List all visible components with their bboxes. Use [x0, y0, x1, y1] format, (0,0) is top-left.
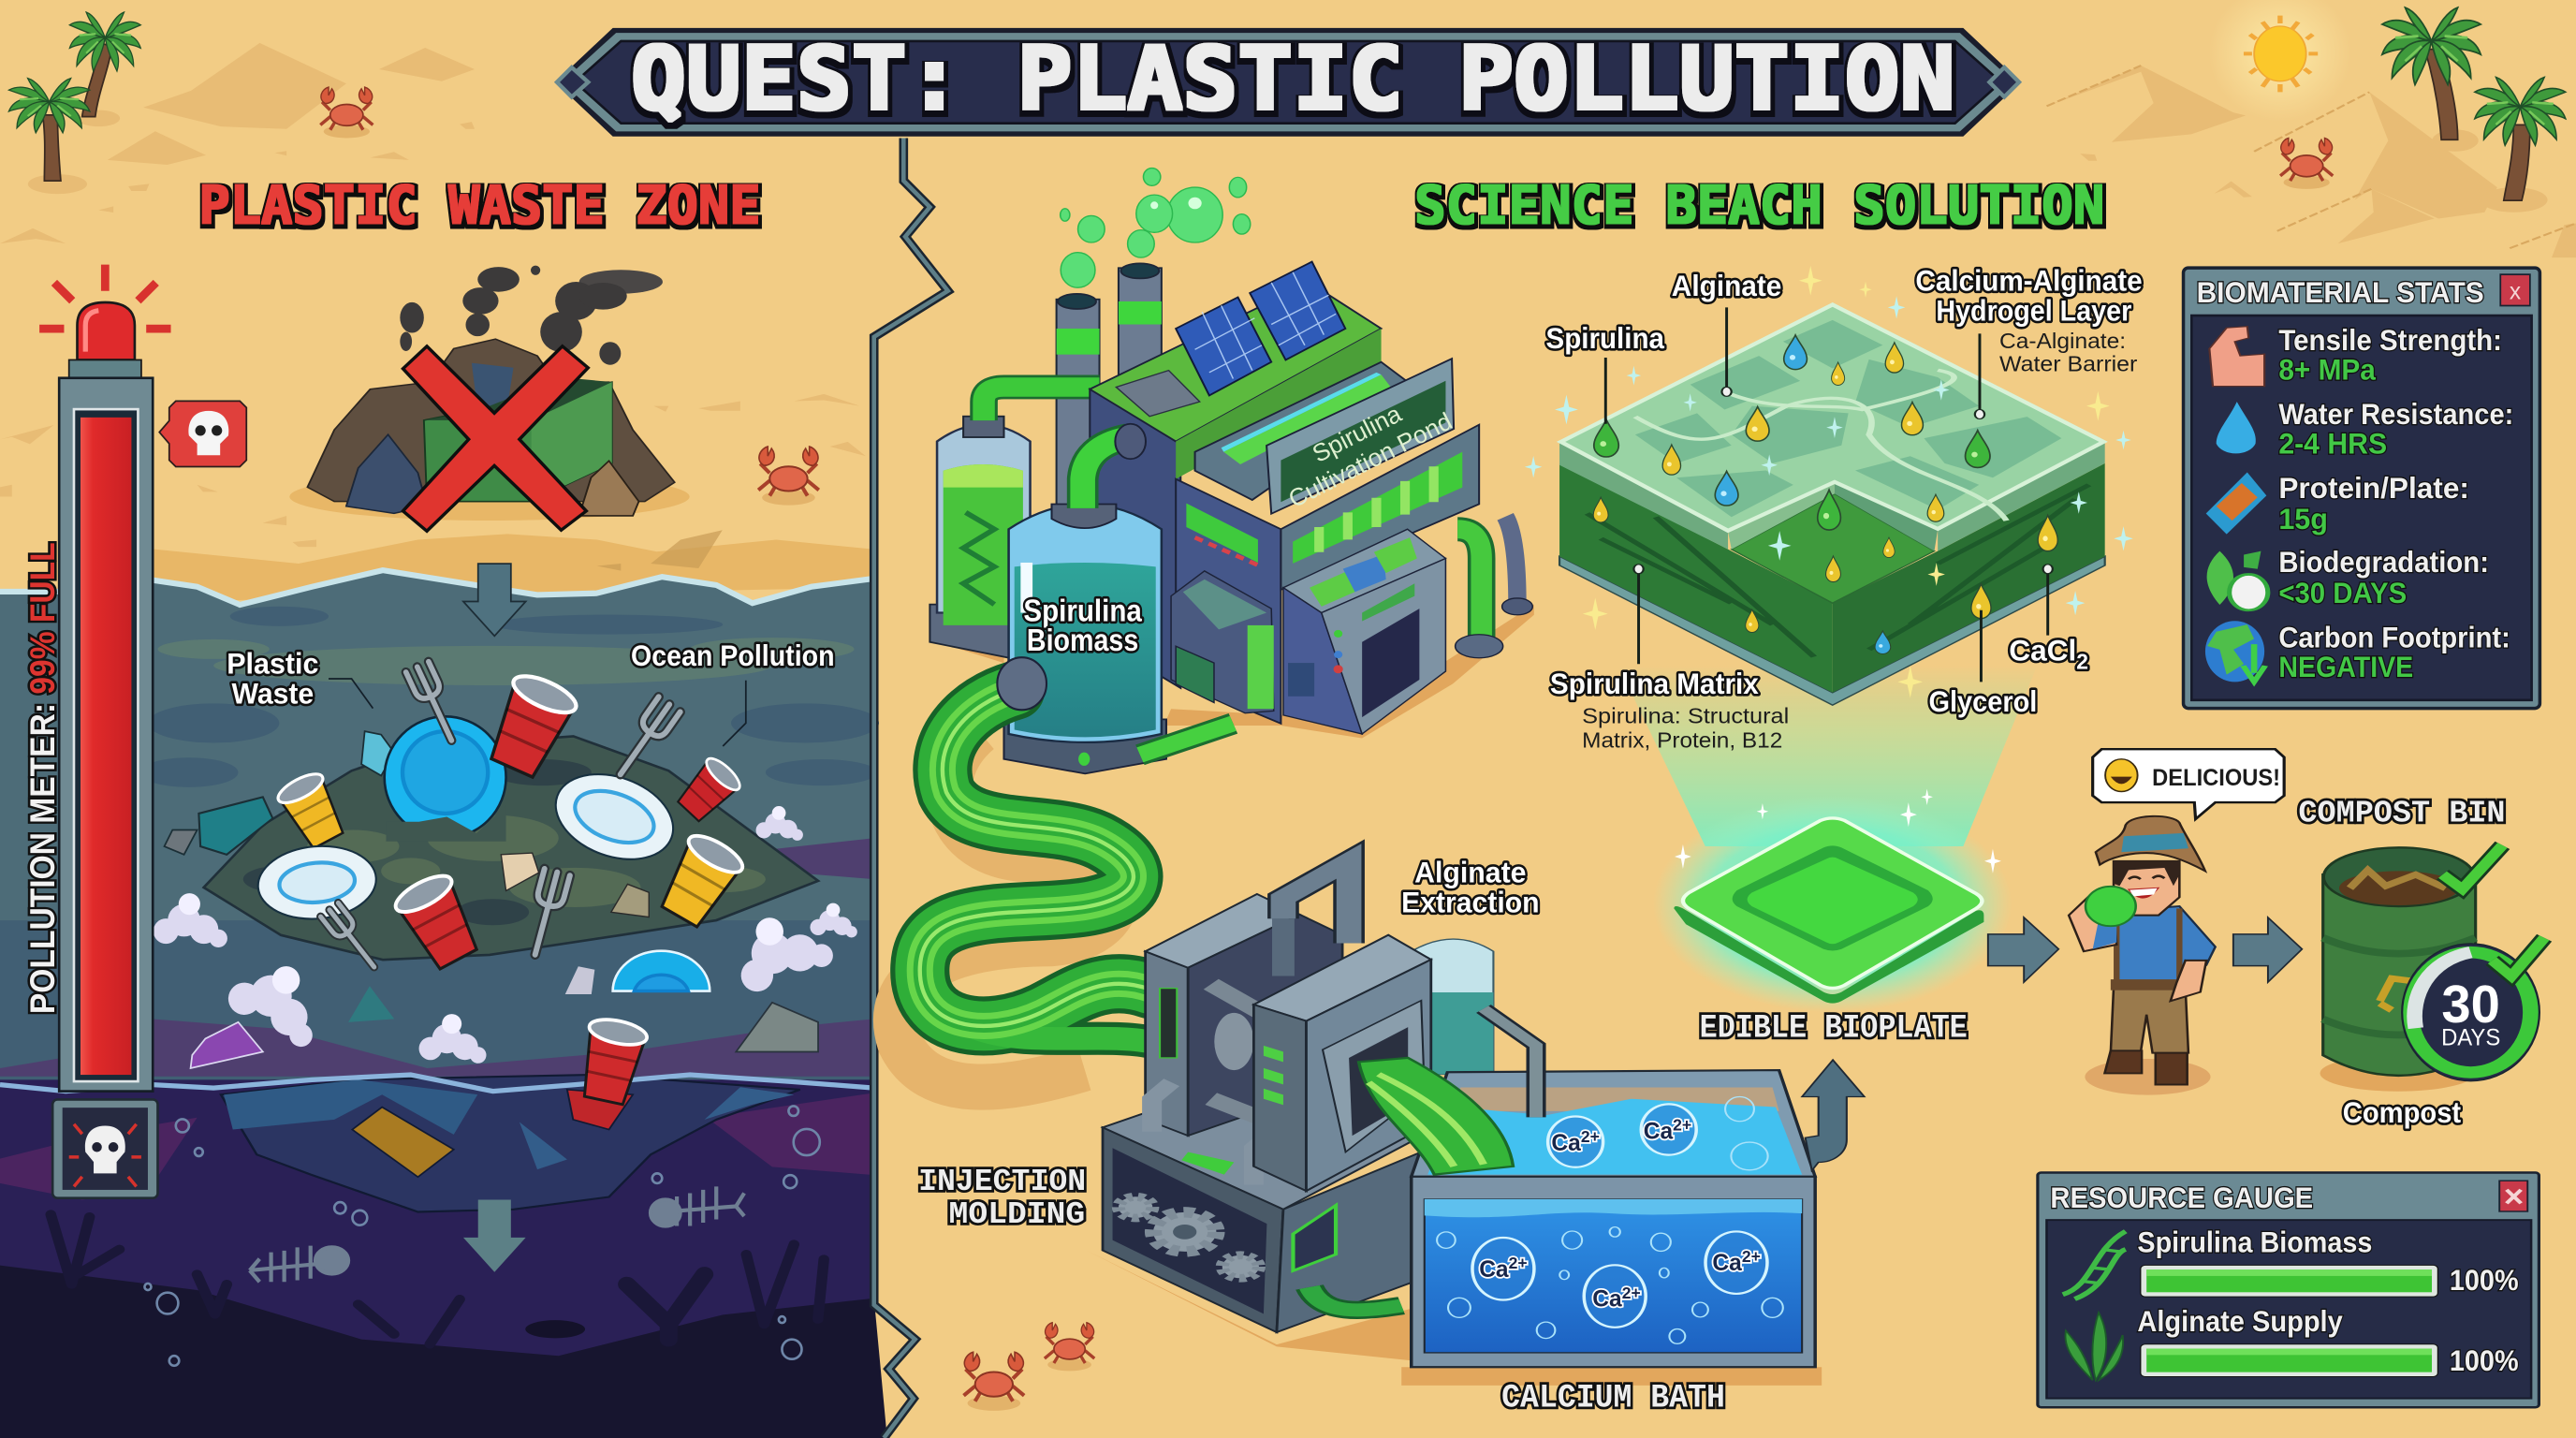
ion bubbles: [1472, 1104, 1767, 1328]
extruded alginate: [1359, 1058, 1513, 1175]
tank outlet ring: [997, 657, 1046, 710]
water: [0, 570, 874, 1085]
water patches: [139, 607, 879, 787]
green spirulina tube: [920, 690, 1150, 1042]
labels: machine and bath: [918, 856, 1725, 1417]
hydrogel block diagram: [1525, 266, 2133, 705]
crabs: [320, 87, 2333, 1411]
compost labels: Compost: [2343, 1095, 2462, 1129]
dunes: top right: [2047, 66, 2576, 257]
plate piece: [2086, 887, 2136, 926]
pipe top: [984, 387, 1100, 420]
alarm light: [39, 265, 171, 378]
labels: machine and bath: MOLDING: [949, 1197, 1085, 1233]
base strip: [1559, 556, 2105, 705]
icon: water drop: [2217, 402, 2256, 453]
lower left wall: [1176, 479, 1281, 724]
leader lines: [1605, 307, 2048, 682]
pond: [1195, 362, 1414, 500]
sign: [1266, 359, 1454, 514]
hat: [2096, 816, 2205, 871]
icon: muscle arm: [2205, 327, 2268, 682]
gears: [1119, 1196, 1259, 1278]
skull box: [52, 1099, 157, 1198]
sign text: Cultivation Pond: [1284, 406, 1456, 513]
label: edible bioplate: EDIBLE BIOPLATE: [1700, 1010, 1968, 1048]
waterline: [0, 1075, 874, 1092]
hydrogel labels: Spirulina: Structural: [1582, 703, 1789, 727]
Ca ions labels: Ca: [1712, 1251, 1742, 1276]
sparkles: [1555, 395, 1578, 424]
dunes: top left: [0, 43, 866, 547]
compost bin: [2320, 845, 2544, 1092]
heading: science beach solution: SCIENCE BEACH SOLUTION: [1414, 176, 2104, 237]
compost labels: [2298, 797, 2506, 1129]
arms: [2069, 893, 2116, 951]
hydrogel labels: Spirulina: [1546, 321, 1664, 355]
title banner: [555, 28, 2021, 137]
panel screen: [1293, 1205, 1336, 1270]
panel: resource gauge: [2038, 1173, 2539, 1407]
panel: plastic waste zone sea: [0, 530, 887, 1438]
base: [1103, 1074, 1414, 1210]
compost labels: COMPOST BIN: [2298, 797, 2506, 832]
skull badge: [159, 401, 246, 467]
back tank: [929, 417, 1031, 659]
floating debris: [154, 806, 857, 1107]
smoke: [400, 266, 663, 365]
head: [2114, 861, 2179, 916]
Ca ions labels: 2+: [1622, 1284, 1641, 1302]
towers: [1146, 951, 1188, 1136]
torso: [2116, 906, 2216, 988]
bath: [1401, 1367, 1822, 1386]
Ca ions labels: 2+: [1673, 1116, 1691, 1135]
panel: resource gauge: 100%: [2450, 1263, 2519, 1297]
labels: plastic waste, ocean pollution: Ocean Pollution: [631, 638, 835, 672]
panel: resource gauge: Alginate Supply: [2137, 1304, 2343, 1338]
arrow: waste to ocean: [463, 564, 526, 636]
panel: biomaterial stats: Carbon Footprint:: [2278, 621, 2510, 654]
icon: dumpster with red X: [289, 266, 690, 531]
label: spirulina biomass: Biomass: [1027, 624, 1138, 658]
panel: biomaterial stats: Protein/Plate:: [2278, 471, 2469, 505]
icon: earth: [2205, 621, 2264, 682]
compost labels: 30: [2441, 975, 2500, 1034]
deep: [0, 1079, 874, 1438]
icon: fish skeletons: [250, 1186, 744, 1282]
plastic waste items: [198, 797, 272, 855]
character: explorer eating plate: [2069, 816, 2216, 1095]
right pipes: [1505, 517, 1517, 605]
panel: biomaterial stats: x: [2510, 279, 2522, 304]
notch: [1732, 493, 1934, 603]
arrow: ocean to seabed: [463, 1199, 526, 1272]
labels: plastic waste, ocean pollution: Waste: [231, 676, 314, 710]
Ca ions labels: Ca: [1479, 1257, 1509, 1283]
30 day ring: [2402, 944, 2539, 1081]
gears in tower: [1214, 1013, 1253, 1070]
Ca ions labels: 2+: [1581, 1127, 1600, 1146]
hydrogel labels: Glycerol: [1928, 684, 2037, 718]
panel: biomaterial stats: 2-4 HRS: [2278, 426, 2387, 460]
icon: sun: [2209, 0, 2351, 122]
panel: biomaterial stats: NEGATIVE: [2278, 650, 2413, 683]
panel: biomaterial stats: 15g: [2278, 502, 2328, 536]
label: spirulina biomass: [1023, 594, 1142, 658]
arrow up: [1802, 1060, 1865, 1170]
factory: spirulina cultivation pond: [929, 262, 1534, 738]
window header: BIOMATERIAL STATS: [2197, 275, 2484, 309]
arrows: [1988, 917, 2058, 982]
panel: biomaterial stats: 8+ MPa: [2278, 353, 2376, 387]
back tank: [1412, 939, 1493, 1074]
labels: machine and bath: CALCIUM BATH: [1501, 1380, 1725, 1417]
cells: [1635, 320, 2061, 517]
X: [403, 346, 588, 531]
legs: [2111, 988, 2188, 1053]
trash island underwater: [221, 1075, 800, 1211]
front tower: [1253, 935, 1431, 1021]
compost labels: DAYS: [2441, 1025, 2500, 1050]
Ca ions labels: 2+: [1509, 1254, 1528, 1272]
panel: resource gauge: Spirulina Biomass: [2137, 1225, 2372, 1259]
labels: machine and bath: Extraction: [1401, 885, 1540, 918]
top pipes: [1283, 861, 1349, 943]
hydrogel labels: Alginate: [1672, 269, 1781, 302]
top layer: [1559, 304, 2105, 532]
vertical text: pollution meter: POLLUTION METER: 99% FULL: [23, 542, 62, 1014]
shadow: [1086, 1251, 1414, 1361]
hydrogel labels: Matrix, Protein, B12: [1582, 728, 1782, 753]
bubbles: underwater: [144, 1106, 820, 1366]
hydrogel labels: Ca-Alginate:: [1999, 329, 2126, 353]
icon: leaf and clock: [2207, 551, 2233, 605]
sea floor silhouettes: [51, 1214, 824, 1344]
edible bioplate: [1653, 789, 2302, 1012]
beam from hydrogel to bioplate: [1618, 666, 2037, 846]
chimneys: [1057, 263, 1162, 634]
sides: [1559, 463, 1833, 693]
panel: biomaterial stats: [2184, 268, 2539, 709]
beach strip: [154, 530, 872, 602]
labels: machine and bath: Alginate: [1414, 856, 1526, 889]
labels: plastic waste, ocean pollution: [227, 638, 835, 746]
ground shadow: [929, 605, 1534, 738]
solar panels: [1176, 262, 1345, 395]
pollution meter: [39, 265, 171, 1198]
Ca ions labels: 2+: [1742, 1247, 1761, 1266]
machine: injection molding: [1086, 861, 1865, 1386]
hydrogel labels: Hydrogel Layer: [1936, 293, 2131, 327]
hydrogel labels: CaCl: [2009, 634, 2076, 668]
icon: protein bar: [2206, 472, 2266, 535]
Ca ions labels: Ca: [1592, 1287, 1622, 1313]
label: spirulina biomass: Spirulina: [1023, 594, 1142, 629]
Ca ions labels: [1479, 1116, 1761, 1313]
speech bubble: delicious: [2093, 749, 2284, 819]
labels: plastic waste, ocean pollution: Plastic: [227, 647, 318, 681]
hydrogel labels: 2: [2076, 649, 2088, 673]
tube shadow: [897, 731, 1116, 1087]
panel: biomaterial stats: Biodegradation:: [2278, 545, 2489, 579]
stats rows: Tensile Strength:: [2278, 323, 2502, 357]
gauge text: RESOURCE GAUGE: [2050, 1181, 2313, 1214]
icon: seaweed: [2065, 1313, 2123, 1380]
panel: resource gauge: 100%: [2450, 1343, 2519, 1377]
small bubbles: [1437, 1097, 1783, 1343]
divider: [874, 138, 948, 1438]
title: QUEST: PLASTIC POLLUTION: [631, 28, 1955, 129]
labels: machine and bath: INJECTION: [918, 1165, 1086, 1200]
trash island surface: [165, 662, 818, 974]
Ca ions labels: Ca: [1551, 1131, 1581, 1156]
icon: DNA: [2063, 1231, 2126, 1299]
speech bubble: delicious: DELICIOUS!: [2152, 766, 2280, 791]
heading: plastic waste zone: PLASTIC WASTE ZONE: [198, 176, 761, 237]
bars: [2141, 1265, 2437, 1297]
entry block: [1283, 529, 1445, 613]
palm trees: [8, 7, 2566, 200]
hydrogel labels: Water Barrier: [1999, 352, 2138, 376]
hydrogel labels: [1546, 264, 2143, 753]
hydrogel labels: Calcium-Alginate: [1915, 264, 2143, 298]
sparkles: [1675, 789, 2001, 873]
hydrogel labels: Spirulina Matrix: [1550, 667, 1759, 700]
panel: biomaterial stats: <30 DAYS: [2278, 576, 2407, 609]
building: [1090, 389, 1180, 688]
panel: biomaterial stats: Water Resistance:: [2278, 397, 2513, 431]
biomass tank: [1003, 169, 1251, 773]
bubbles: [1061, 169, 1251, 287]
Ca ions labels: Ca: [1644, 1120, 1673, 1145]
right upper: [1281, 425, 1479, 590]
droplets: [1784, 335, 1807, 370]
sign text: Spirulina: [1308, 399, 1406, 468]
